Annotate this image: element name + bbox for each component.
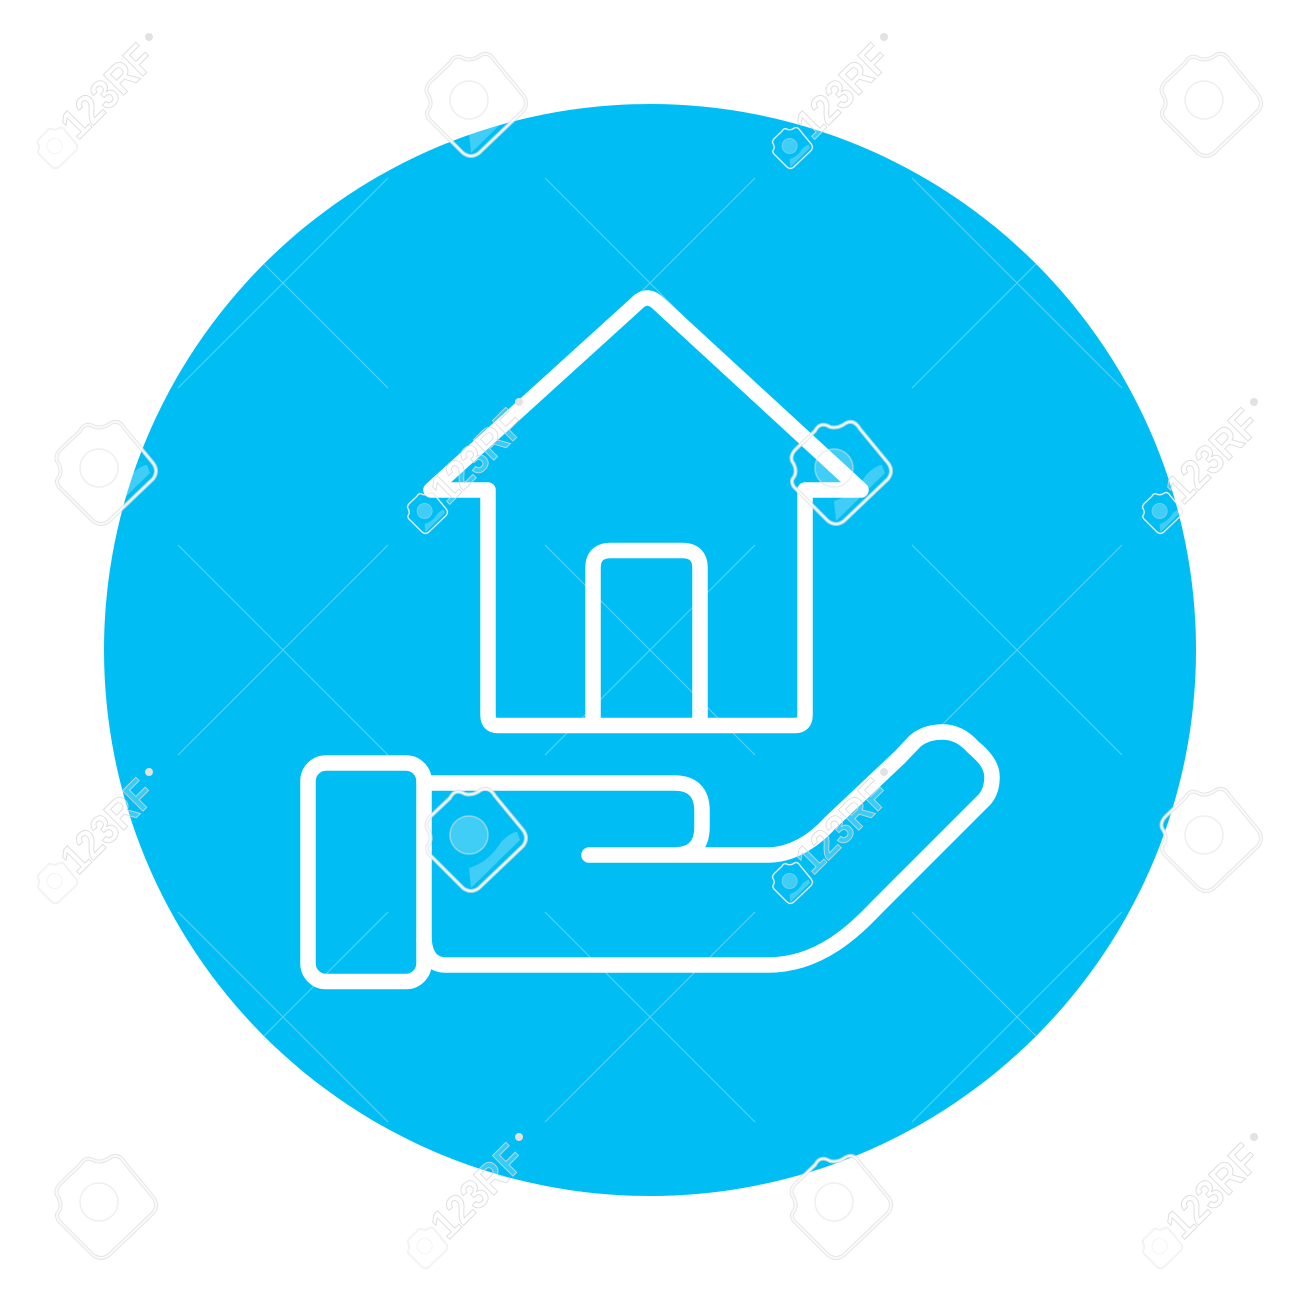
icon: hand with cuff (308, 732, 992, 982)
icon: house (431, 298, 861, 726)
watermark guide lines (178, 178, 1122, 1122)
hand palm and fingers (424, 732, 992, 965)
icon: house door (593, 550, 700, 725)
hand cuff (308, 763, 424, 982)
blue circle background (104, 104, 1196, 1196)
